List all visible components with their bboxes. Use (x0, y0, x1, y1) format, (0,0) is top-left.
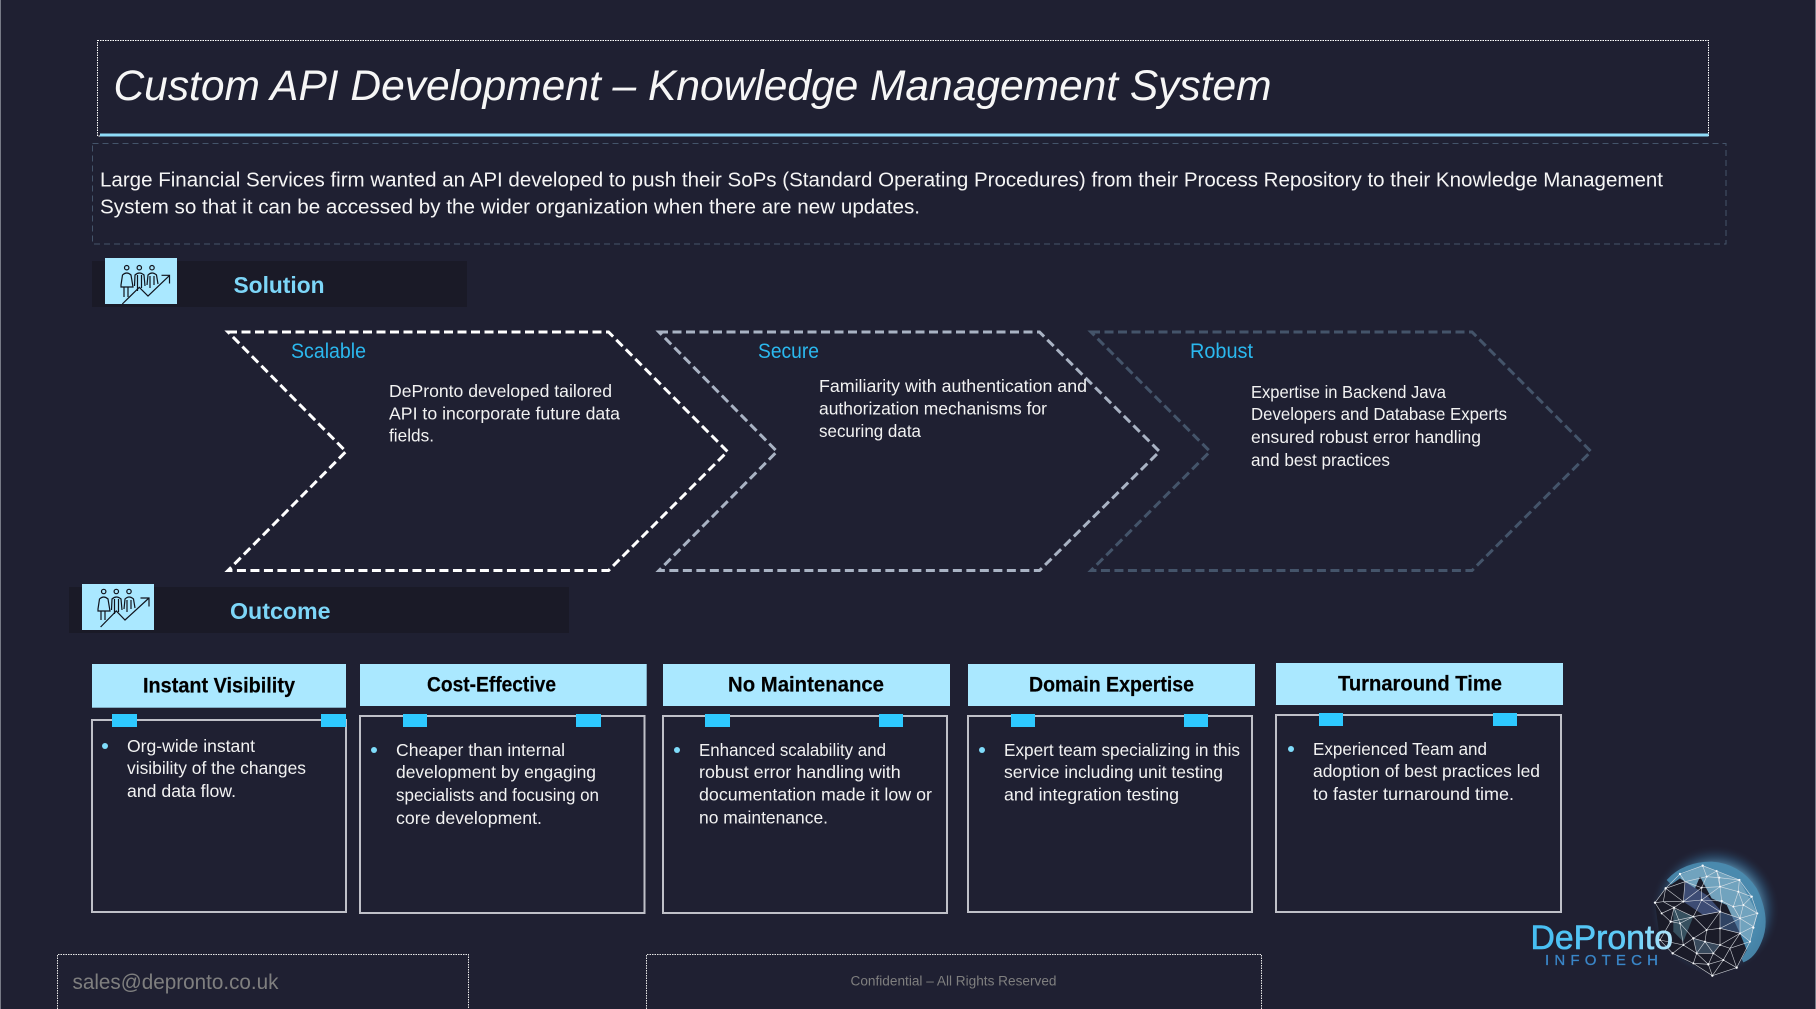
intro text panel: Large Financial Services firm wanted an API developed to push their SoPs (Standard Operating Procedures) from their Process Repository to their Knowledge Management (100, 169, 1663, 192)
card: Cost-Effective: development by engaging (396, 762, 596, 782)
footer box: confidentiality: Confidential – All Rights Reserved (850, 974, 1056, 989)
outcome section header (69, 584, 569, 633)
card: No Maintenance: robust error handling with (699, 762, 901, 782)
footer box: email (58, 954, 468, 1009)
chevron: Secure: Familiarity with authentication and (819, 376, 1087, 396)
tagline: INFOTECH (1545, 952, 1658, 969)
card: Instant Visibility: visibility of the changes (127, 758, 306, 778)
card: Turnaround Time (1276, 663, 1563, 912)
chevron: Robust: ensured robust error handling (1251, 427, 1481, 447)
card: Instant Visibility: Org-wide instant (127, 736, 255, 756)
title: Custom API Development – Knowledge Management System (114, 62, 1272, 110)
card: Domain Expertise: and integration testing (1004, 785, 1179, 805)
intro text panel (92, 144, 1726, 244)
intro text panel: System so that it can be accessed by the wider organization when there are new updates. (100, 196, 920, 219)
chevron: Robust (1091, 332, 1591, 570)
chevron: Robust: Expertise in Backend Java (1251, 382, 1446, 402)
card: Cost-Effective: Cheaper than internal (396, 740, 565, 760)
icon: people with growth arrow (105, 258, 177, 304)
card: Domain Expertise: Expert team specializing in this (1004, 740, 1240, 760)
card: Turnaround Time: Experienced Team and (1313, 739, 1487, 759)
card: Instant Visibility (92, 664, 346, 912)
card: Domain Expertise (968, 664, 1255, 912)
chevron: Scalable: DePronto developed tailored (389, 381, 612, 401)
card: No Maintenance: Enhanced scalability and (699, 740, 886, 760)
chevron: Secure: securing data (819, 421, 921, 441)
icon: people with growth arrow (82, 584, 154, 630)
card: Instant Visibility: Instant Visibility (143, 675, 295, 698)
wordmark: DePronto (1530, 919, 1673, 957)
chevron: Scalable: Scalable (291, 340, 366, 363)
chevron: Secure: authorization mechanisms for (819, 398, 1047, 418)
card: Domain Expertise: Domain Expertise (1029, 674, 1194, 697)
logo: DePronto Infotech (1530, 845, 1780, 977)
heading: Outcome: Outcome (230, 598, 331, 624)
chevron: Secure (659, 332, 1160, 570)
title panel (98, 40, 1708, 136)
chevron: Scalable: API to incorporate future data (389, 404, 620, 424)
card: Turnaround Time: to faster turnaround time. (1313, 784, 1514, 804)
chevron: Secure: Secure (758, 340, 819, 363)
card: Instant Visibility: and data flow. (127, 781, 236, 801)
card: No Maintenance: no maintenance. (699, 808, 828, 828)
card: No Maintenance: No Maintenance (728, 674, 884, 697)
chevron: Robust: and best practices (1251, 450, 1390, 470)
chevron: Robust: Developers and Database Experts (1251, 404, 1507, 424)
chevron: Robust: Robust (1190, 340, 1253, 363)
chevron: Scalable: fields. (389, 426, 434, 446)
card: Cost-Effective (360, 664, 647, 913)
heading: Solution: Solution (234, 272, 324, 298)
card: Turnaround Time: adoption of best practices led (1313, 761, 1540, 781)
card: No Maintenance (663, 664, 950, 913)
footer box: confidentiality (646, 954, 1262, 1009)
card: Cost-Effective: Cost-Effective (427, 674, 556, 696)
card: Cost-Effective: specialists and focusing on (396, 785, 599, 805)
card: Turnaround Time: Turnaround Time (1338, 673, 1502, 696)
card: Domain Expertise: service including unit testing (1004, 762, 1223, 782)
solution section header (92, 258, 467, 307)
icon: network globe (1650, 845, 1780, 977)
card: No Maintenance: documentation made it low or (699, 785, 932, 805)
chevron: Scalable (228, 332, 728, 570)
card: Cost-Effective: core development. (396, 808, 542, 828)
footer box: email: sales@depronto.co.uk (72, 971, 279, 994)
